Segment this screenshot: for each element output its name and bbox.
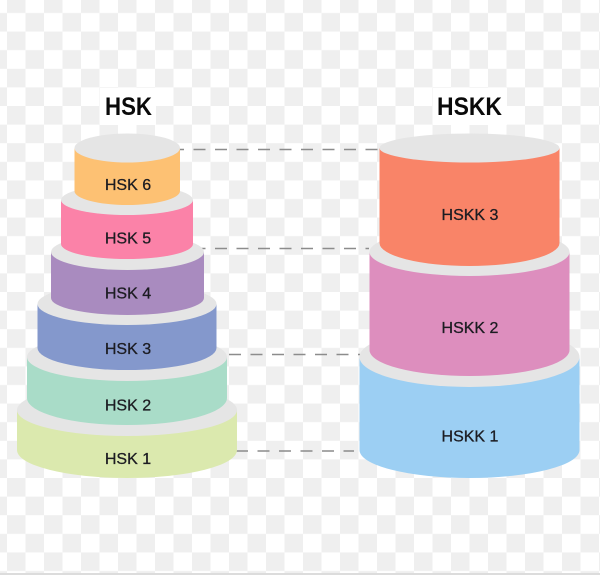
tier: HSK 5: HSK 5 xyxy=(105,230,151,248)
tier: HSK 2: HSK 2 xyxy=(105,398,151,414)
tier: HSK 6 xyxy=(74,134,180,205)
tier: HSK 4: HSK 4 xyxy=(105,286,151,302)
tier: HSK 3: HSK 3 xyxy=(105,341,151,358)
dashed connector: HSK 4 to HSKK 2 xyxy=(194,248,369,250)
tier: HSK 1 xyxy=(17,384,237,478)
title: HSK: HSK xyxy=(105,93,152,121)
tier: HSK 5 xyxy=(61,185,193,259)
tier: HSK 2 xyxy=(27,333,227,425)
stacked cake: HSKK levels xyxy=(360,134,580,478)
tier: HSK 3 xyxy=(38,283,216,370)
tier: HSKK 1: HSKK 1 xyxy=(442,428,499,446)
tier: HSKK 2: HSKK 2 xyxy=(442,320,499,337)
tier: HSKK 1 xyxy=(360,327,580,478)
dashed connector: HSK 6 to top of HSKK 3 xyxy=(172,148,379,150)
tier: HSK 4 xyxy=(51,234,204,315)
tier: HSK 1: HSK 1 xyxy=(105,451,151,468)
dashed connector: HSK 3 to HSKK 1 xyxy=(229,354,360,356)
tier: HSKK 2 xyxy=(370,228,570,376)
title: HSKK: HSKK xyxy=(437,93,502,121)
stacked cake: HSK levels xyxy=(17,134,237,478)
tier: HSK 6: HSK 6 xyxy=(105,177,151,194)
dashed connector: HSK 1 to bottom of HSKK 1 xyxy=(236,450,354,452)
tier: HSKK 3 xyxy=(380,134,560,266)
tier: HSKK 3: HSKK 3 xyxy=(442,207,499,224)
